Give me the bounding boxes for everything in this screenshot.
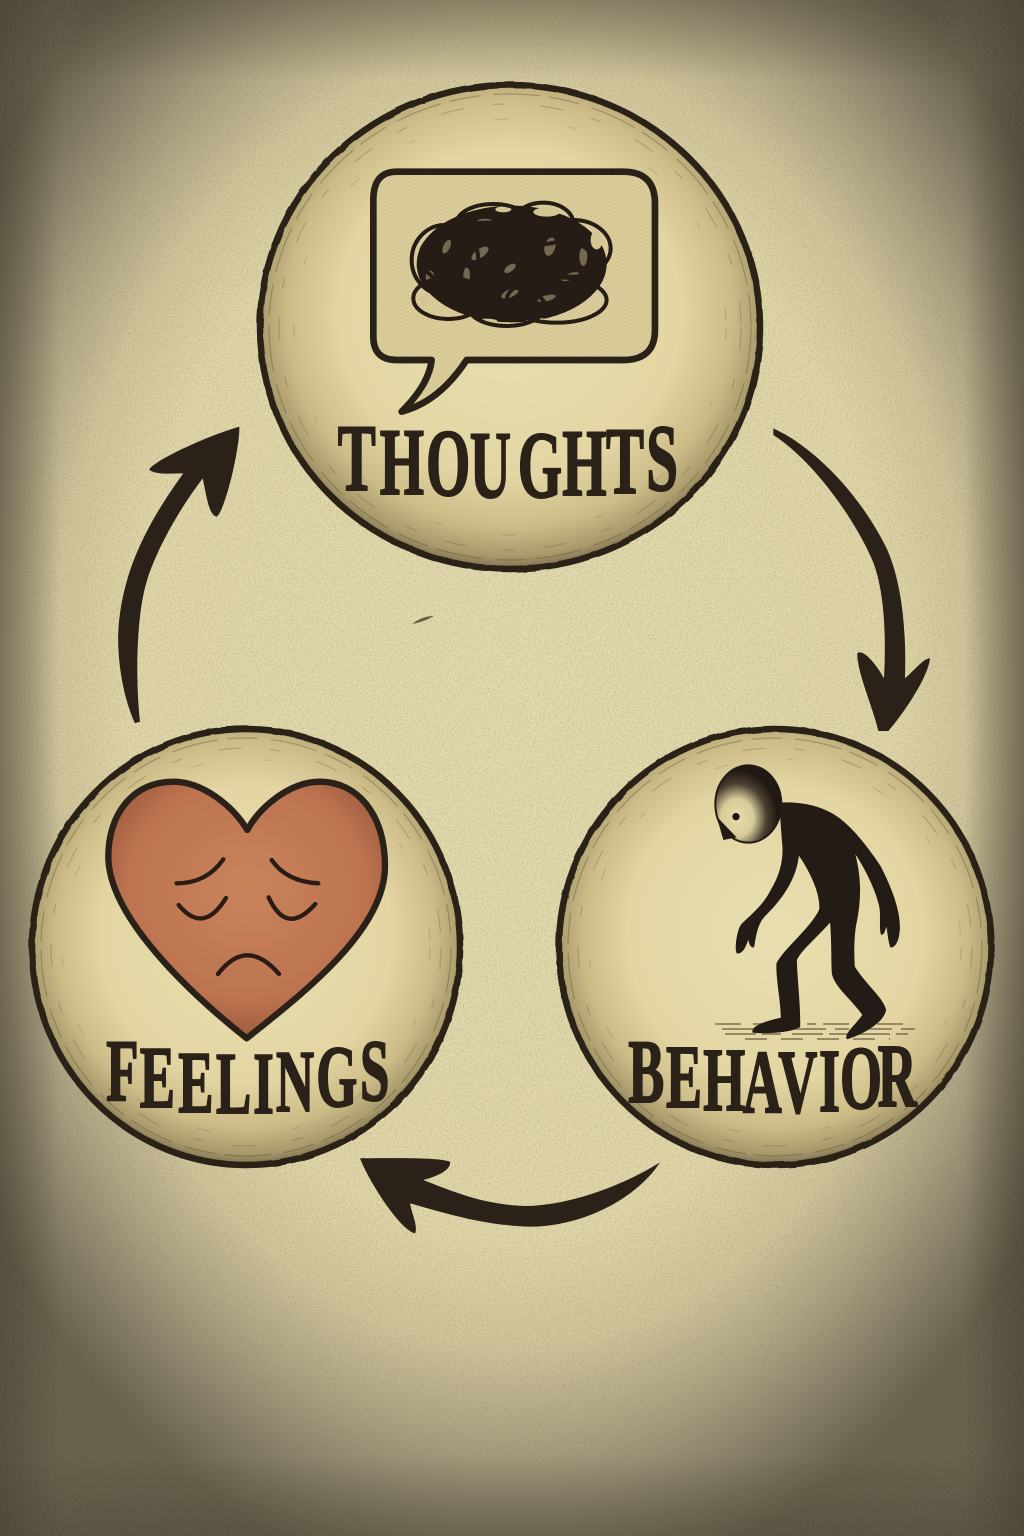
panel: thoughts: [260, 85, 760, 569]
arrow: behavior to feelings: [360, 1158, 660, 1233]
icon: speech bubble: [373, 172, 655, 412]
arrow: feelings to thoughts: [118, 427, 239, 723]
circle: behavior: [559, 729, 991, 1165]
figure body: [737, 803, 899, 1038]
figure beak: [717, 817, 737, 840]
sad face: [177, 859, 318, 974]
panel: behavior: [559, 729, 991, 1165]
panel: feelings: [32, 729, 460, 1165]
paper speck: [412, 616, 434, 624]
label: feelings: FEELINGS: [106, 1021, 389, 1132]
icon: tangled scribble: [412, 203, 611, 326]
icon: slumped figure: [715, 765, 899, 1038]
figure eye: [732, 813, 740, 820]
figure head: [715, 765, 781, 843]
icon: sad heart: [108, 782, 385, 1038]
ground shadow: [715, 1024, 915, 1039]
circle: feelings: [32, 729, 460, 1165]
label: behavior: BEHAVIOR: [628, 1023, 918, 1133]
label: thoughts: THOUGHTS: [338, 405, 678, 518]
heart shape: [108, 782, 385, 1038]
arrow: thoughts to behavior: [773, 428, 930, 731]
circle: thoughts: [260, 85, 760, 569]
